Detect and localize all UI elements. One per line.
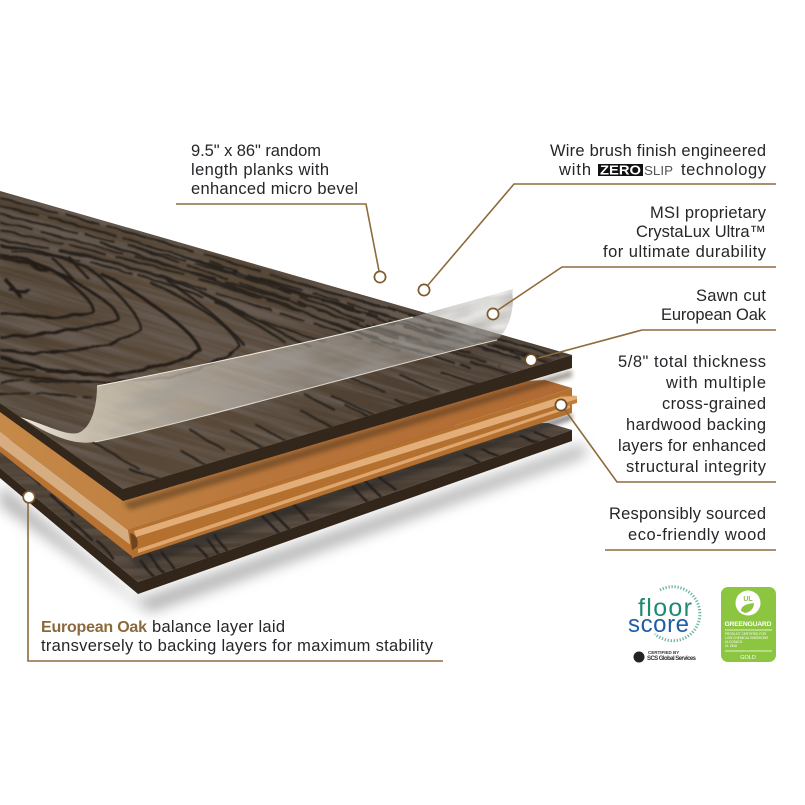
callout: wire brush finish [418,142,776,296]
underline [605,549,776,551]
tan side of the core [0,432,132,548]
top sawn cut European Oak wear layer [0,191,575,512]
wordmark: floor [638,594,692,622]
text: total thickness: with multiple [665,374,766,392]
text: total thickness: cross-grained [662,395,766,413]
text: sawn cut: European Oak [661,306,767,324]
text: plank dimensions: enhanced micro bevel [191,180,358,198]
callout: total thickness [555,353,776,482]
text: plank dimensions: 9.5" x 86" random [191,142,321,160]
marker [487,308,499,320]
logo: Greenguard Gold [721,587,776,662]
text: total thickness: hardwood backing [626,416,766,434]
text: CrystaLux Ultra: CrystaLux Ultra™ [636,223,766,241]
orange side strip [0,446,134,558]
text: wire brush finish: with [558,161,591,179]
text: CrystaLux Ultra [603,204,767,261]
leader line [176,204,379,271]
text: wire brush finish: ZERO [600,162,641,178]
light veneer stripes [134,396,577,537]
logo: Greenguard Gold: PRODUCT CERTIFIED FOR [725,632,767,636]
text: sawn cut [661,287,767,324]
text: total thickness: structural integrity [626,458,767,476]
text: balance layer: European Oak [41,619,147,636]
text: sawn cut: Sawn cut [696,287,766,305]
long wood grain [0,198,560,482]
marker [525,354,537,366]
logo: FloorScore: CERTIFIED BY [648,650,679,655]
groove [130,533,138,550]
text: total thickness: layers for enhanced [618,437,766,455]
logo: Greenguard Gold: UL 2818 [725,644,737,648]
text: CrystaLux Ultra: for ultimate durability [603,243,767,261]
logo: Greenguard Gold: GOLD [740,655,756,661]
text: plank dimensions: length planks with [191,161,329,179]
text: wire brush finish: SLIP [644,163,673,178]
dotted ring [655,587,700,641]
film overhang beyond plank edge [413,289,513,345]
middle cross-grained backing layers [0,380,577,568]
callout: plank dimensions [176,142,386,283]
text: plank dimensions [191,142,358,198]
text: total thickness: 5/8" total thickness [618,353,766,371]
logo: Greenguard Gold: LOW CHEMICAL EMISSIONS [725,636,768,640]
tongue [560,395,577,408]
leader line [28,502,443,661]
text: total thickness [618,353,767,476]
leader line [498,267,776,310]
logo: FloorScore: SCS Global Services [647,656,697,662]
leader line [428,184,776,285]
drop shadow under planks [0,444,585,612]
text: balance layer: transversely to backing layers for maximum stability [41,637,434,655]
text: responsibly sourced [609,505,766,544]
logo: Greenguard Gold: UL [743,596,753,603]
cathedral grain rings [0,245,240,382]
text: balance layer: balance layer laid [152,618,285,636]
leader line [565,410,776,482]
peeling CrystaLux film [20,290,513,443]
marker [418,284,430,296]
logo: FloorScore [628,587,700,662]
logo: Greenguard Gold: GREENGUARD [724,621,772,628]
orange top face [0,380,572,530]
logo: Greenguard Gold: ULCOM/GG [725,640,743,644]
marker [23,491,35,503]
marker [555,399,567,411]
bottom balance layer plank [0,420,580,594]
text: balance layer [41,618,434,655]
marker [374,271,386,283]
callout: CrystaLux Ultra [487,204,776,320]
text: wire brush finish [550,142,767,179]
text: wire brush finish: Wire brush finish engineered [550,142,766,160]
text: responsibly sourced: Responsibly sourced [609,505,766,523]
SCS badge [634,652,644,662]
text: CrystaLux Ultra: MSI proprietary [650,204,767,222]
callout: balance layer [23,491,443,661]
leader line [538,330,776,358]
text: responsibly sourced: eco-friendly wood [628,526,766,544]
front face of the backing layers [128,388,572,558]
text: wire brush finish: technology [681,161,767,179]
callout: responsibly sourced [605,505,776,550]
logo: FloorScore: score [628,611,689,638]
callout: sawn cut European Oak [525,287,776,366]
